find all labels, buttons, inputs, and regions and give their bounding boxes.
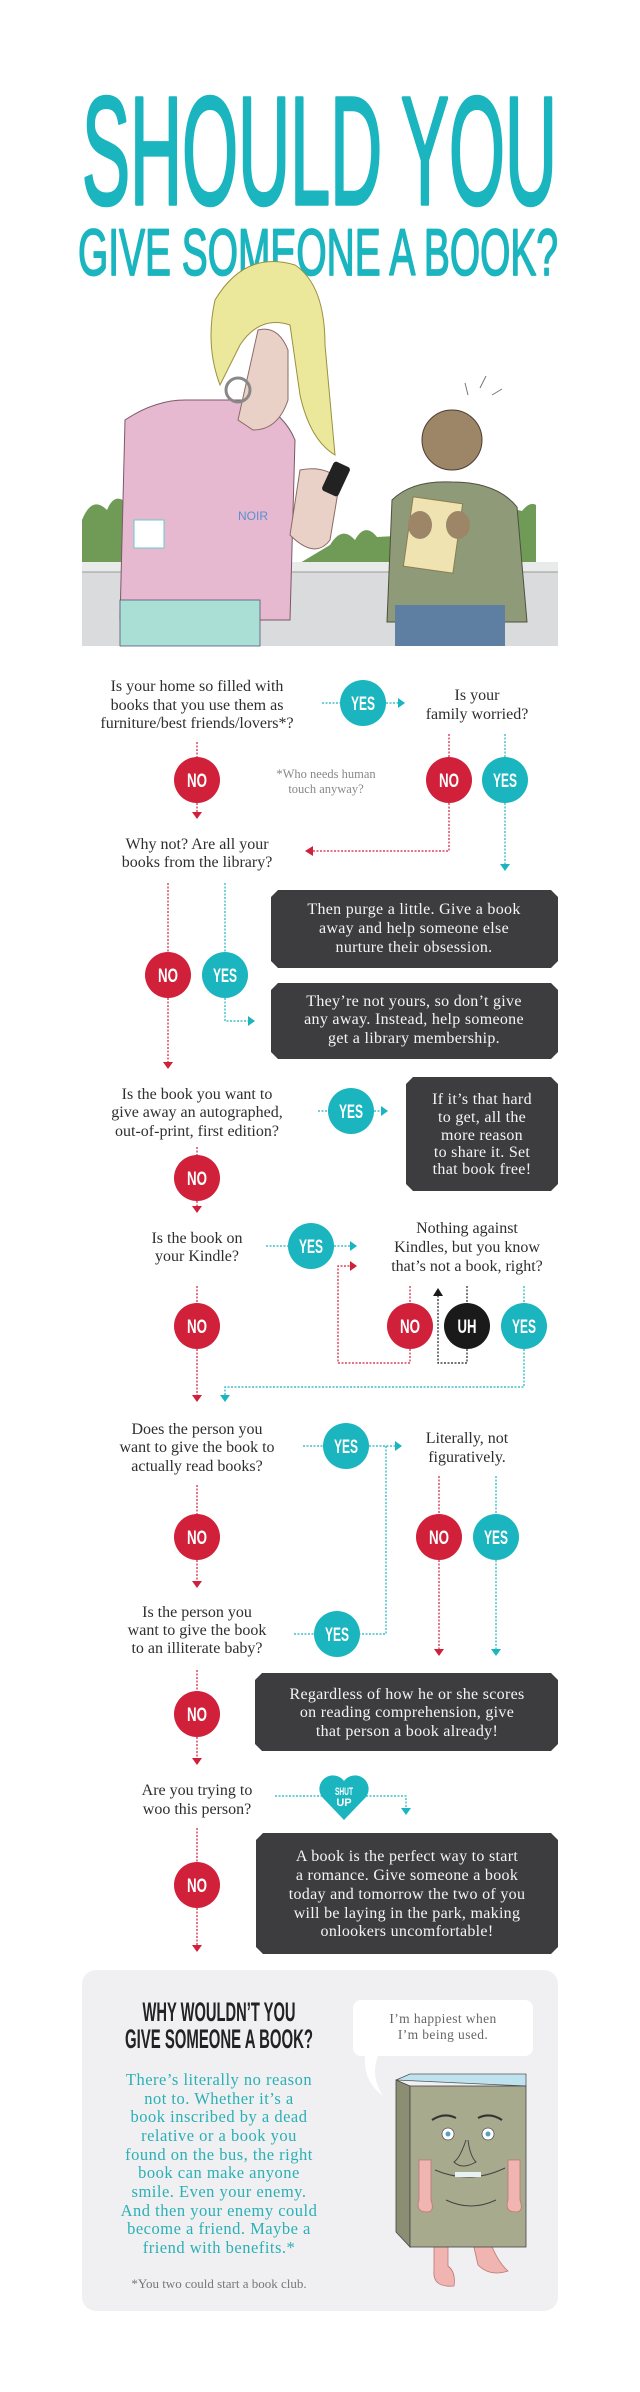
box: purge: away and help someone else [319,920,509,937]
question 3: out-of-print, first edition? [115,1123,279,1140]
box: purge: Then purge a little. Give a book [307,901,521,918]
connector: q4 yes: YES [299,1237,323,1258]
connector: literally yes: YES [484,1528,508,1549]
question 1: Is your home so filled with [111,678,283,695]
question 5 [119,1421,275,1475]
question 7: woo this person? [143,1801,251,1818]
connector: kindle uh: UH [458,1317,476,1338]
connector: q5 yes: YES [334,1437,358,1458]
footnote: human touch: *Who needs human [276,767,376,781]
speech bubble: I’m happiest when [389,2011,497,2026]
question 3: Is the book you want to [122,1086,272,1103]
connector: literally no: NO [429,1528,449,1549]
box: romance [256,1833,558,1954]
man [422,410,482,470]
question 6 [128,1604,266,1657]
box: romance: will be laying in the park, making [294,1905,520,1922]
panel paragraph: book inscribed by a dead [131,2107,308,2126]
icon: shut up heart [275,1775,411,1820]
icon: book character [396,2074,526,2286]
box: set book free: more reason [441,1127,523,1144]
connector: q1 no [174,742,220,819]
connector: family yes [482,734,528,871]
box: romance: A book is the perfect way to start [296,1848,518,1865]
connector: q1 yes [322,680,405,726]
question 4 [151,1230,243,1265]
box: romance: onlookers uncomfortable! [321,1923,493,1940]
box: set book free: that book free! [433,1161,531,1178]
connector: q2 yes: YES [213,966,237,987]
box: give a book already [255,1673,558,1751]
question 1: books that you use them as [111,697,283,714]
connector: q6 no: NO [187,1705,207,1726]
connector: family no [305,734,472,856]
illustration: woman with phone and man with book [82,262,558,646]
question 1: furniture/best friends/lovers*? [100,715,294,732]
box: romance: a romance. Give someone a book [296,1867,518,1884]
question 7: Are you trying to [142,1782,252,1799]
connector: q5 yes [303,1423,402,1634]
panel heading: WHY WOULDN’T YOU [142,1997,296,2027]
panel paragraph: become a friend. Maybe a [127,2219,311,2238]
connector: q1 no: NO [187,771,207,792]
panel footnote: *You two could start a book club. [131,2276,307,2291]
connector: kindle no loop [338,1261,433,1363]
question 2: Why not? Are all your [125,836,269,853]
footnote: human touch [276,767,376,796]
connector: q3 yes: YES [339,1102,363,1123]
question: kindle not a book: that’s not a book, right? [391,1258,543,1275]
panel paragraph: not to. Whether it’s a [144,2089,294,2108]
box: purge: nurture their obsession. [336,939,492,956]
connector: q6 yes: YES [325,1625,349,1646]
question: literally [426,1430,509,1466]
question 6: want to give the book [128,1622,266,1639]
connector: q7 no: NO [187,1876,207,1897]
question 6: Is the person you [142,1604,252,1621]
connector: kindle no loop: NO [400,1317,420,1338]
question 4: Is the book on [151,1230,243,1247]
speech bubble [353,2000,533,2096]
box: purge [271,890,558,968]
box: library [271,983,558,1059]
connector: literally yes [473,1476,519,1656]
question 5: actually read books? [131,1458,263,1475]
connector: q7 no [174,1828,220,1952]
question 3: give away an autographed, [111,1104,283,1121]
connector: kindle uh [433,1286,490,1363]
connector: literally no [416,1476,462,1656]
question 5: want to give the book to [119,1439,275,1456]
panel heading [125,1997,313,2054]
question 2 [122,836,272,871]
connector: q2 no: NO [158,966,178,987]
question: kindle not a book: Nothing against [416,1220,518,1237]
box: library: get a library membership. [328,1030,500,1047]
connector: q3 no [174,1147,220,1213]
question 6: to an illiterate baby? [131,1640,263,1657]
question: literally: Literally, not [426,1430,509,1447]
box: give a book already: Regardless of how he or she scores [289,1686,525,1703]
question: family worried: family worried? [426,706,528,723]
question 5: Does the person you [131,1421,263,1438]
icon: shut up heart: SHUT [335,1786,353,1798]
box: give a book already: that person a book already! [316,1723,498,1740]
connector: q4 no: NO [187,1317,207,1338]
question 7 [142,1782,252,1818]
title [78,65,558,289]
connector: q4 yes [266,1223,357,1269]
panel paragraph: friend with benefits.* [143,2238,295,2257]
connector: family no: NO [439,771,459,792]
connector: q6 yes [294,1611,360,1657]
question 1 [100,678,294,732]
icon: shut up heart: UP [336,1797,352,1809]
connector: family yes: YES [493,771,517,792]
panel paragraph: There’s literally no reason [126,2070,312,2089]
panel paragraph: found on the bus, the right [125,2145,313,2164]
connector: q1 yes: YES [351,694,375,715]
box: give a book already: on reading comprehension, give [300,1704,514,1721]
woman [120,400,295,620]
footnote: human touch: touch anyway? [288,782,364,796]
box: library: They’re not yours, so don’t give [306,993,522,1010]
panel: why wouldn't you [82,1970,558,2311]
connector: q5 no: NO [187,1528,207,1549]
connector: q6 no [174,1670,220,1765]
question 2: books from the library? [122,854,272,871]
question: literally: figuratively. [428,1449,506,1466]
panel paragraph [121,2070,318,2257]
panel paragraph: And then your enemy could [121,2201,318,2220]
question: kindle not a book [391,1220,543,1275]
panel heading: GIVE SOMEONE A BOOK? [125,2024,313,2054]
panel paragraph: smile. Even your enemy. [132,2182,306,2201]
question: kindle not a book: Kindles, but you know [394,1239,540,1256]
panel paragraph: relative or a book you [141,2126,297,2145]
connector: kindle yes [220,1286,547,1402]
connector: q3 yes [318,1088,388,1134]
connector: q3 no: NO [187,1169,207,1190]
question 3 [111,1086,283,1140]
box: romance: today and tomorrow the two of you [289,1886,525,1903]
box: set book free: to get, all the [438,1109,526,1126]
box: set book free: to share it. Set [434,1144,530,1161]
question: family worried: Is your [455,687,500,704]
box: set book free: If it’s that hard [432,1091,532,1108]
panel paragraph: book can make anyone [138,2163,300,2182]
connector: q2 no [145,883,191,1069]
connector: kindle yes: YES [512,1317,536,1338]
connector: q5 no [174,1485,220,1588]
connector: q2 yes [202,883,255,1026]
question: family worried [426,687,528,723]
box: library: any away. Instead, help someone [304,1011,524,1028]
illustration: woman with phone and man with book: NOIR [238,509,268,523]
box: set book free [406,1077,558,1191]
connector: q4 no [174,1286,220,1402]
question 4: your Kindle? [155,1248,239,1265]
speech bubble: I’m being used. [398,2027,488,2042]
